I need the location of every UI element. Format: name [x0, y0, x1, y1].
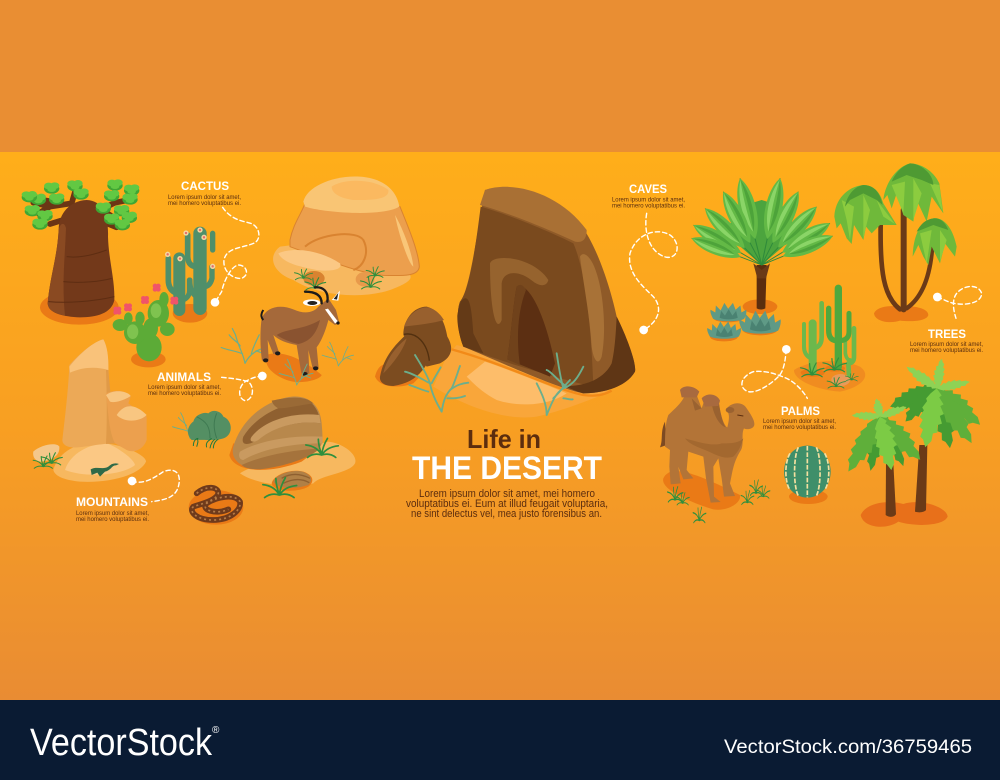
connector: cactus	[211, 207, 259, 307]
label: caves: Lorem ipsum dolor sit amet,	[612, 196, 685, 204]
label: animals: ANIMALS	[157, 370, 211, 384]
center scene: cave	[375, 187, 635, 417]
label: mountains	[76, 495, 149, 523]
label: trees	[910, 327, 983, 354]
icon: agave shrubs	[707, 303, 781, 341]
label: trees: Lorem ipsum dolor sit amet,	[910, 341, 983, 348]
label: caves: CAVES	[629, 182, 667, 196]
label: cactus	[168, 179, 241, 207]
title	[412, 424, 602, 486]
icon: dry twigs	[405, 353, 583, 415]
title: Life in	[467, 424, 541, 454]
icon: bactrian camel	[660, 386, 770, 523]
label: caves: mei homero voluptatibus ei.	[612, 202, 685, 210]
icon: baobab tree	[22, 179, 139, 325]
label: cactus: mei homero voluptatibus ei.	[168, 200, 241, 207]
watermark footer bar: VectorStock.com/36759465	[724, 737, 972, 758]
label: palms	[763, 404, 836, 431]
label: cactus: Lorem ipsum dolor sit amet,	[168, 194, 241, 201]
icon: green saguaro group	[794, 288, 865, 392]
icon: striped boulder	[229, 396, 355, 498]
connector: palms	[742, 345, 807, 398]
label: animals: Lorem ipsum dolor sit amet,	[148, 384, 221, 391]
icon: coiled snake	[189, 488, 243, 525]
watermark footer bar	[0, 700, 1000, 780]
label: palms: mei homero voluptatibus ei.	[763, 424, 836, 431]
icon: sandstone boulder	[273, 177, 419, 295]
label: mountains: MOUNTAINS	[76, 495, 148, 509]
icon: date palms	[834, 163, 957, 322]
icon: prickly pear cactus	[113, 284, 178, 367]
watermark footer bar: VectorStock	[30, 722, 213, 764]
icon: gazelle	[221, 287, 353, 385]
description text: Lorem ipsum dolor sit amet, mei homero	[419, 488, 595, 500]
label: trees: TREES	[928, 327, 966, 341]
connector: trees	[933, 286, 982, 318]
left scene illustrations	[22, 177, 419, 525]
description text	[406, 488, 608, 520]
icon: green bush	[172, 411, 231, 448]
label: animals: mei homero voluptatibus ei.	[148, 390, 221, 397]
connector: caves	[630, 213, 677, 334]
description text: voluptatibus ei. Eum at illud feugait voluptaria,	[406, 498, 608, 510]
label: palms: PALMS	[781, 404, 820, 418]
connector: animals	[222, 372, 267, 401]
icon: saguaro cactus	[165, 227, 215, 323]
label: palms: Lorem ipsum dolor sit amet,	[763, 418, 836, 425]
label: mountains: mei homero voluptatibus ei.	[76, 516, 149, 523]
connector: mountains	[128, 470, 179, 502]
icon: small rocks	[375, 307, 451, 387]
label: animals	[148, 370, 221, 397]
label: mountains: Lorem ipsum dolor sit amet,	[76, 510, 149, 517]
icon: barrel cactus	[784, 446, 831, 504]
title: THE DESERT	[412, 450, 602, 486]
icon: coconut palms	[840, 358, 987, 527]
dashed connectors and dots	[128, 207, 982, 502]
watermark footer bar: ®	[212, 725, 220, 736]
right scene illustrations	[660, 163, 987, 527]
label: cactus: CACTUS	[181, 179, 229, 193]
label: trees: mei homero voluptatibus ei.	[910, 347, 983, 354]
label: caves	[612, 182, 685, 210]
icon: tall mesa rocks	[33, 339, 147, 482]
description text: ne sint delectus vel, mea justo forensibus an.	[411, 508, 602, 520]
sand base	[433, 345, 612, 417]
icon: brown cave rock	[457, 187, 635, 393]
icon: fan palm tree	[689, 176, 835, 314]
